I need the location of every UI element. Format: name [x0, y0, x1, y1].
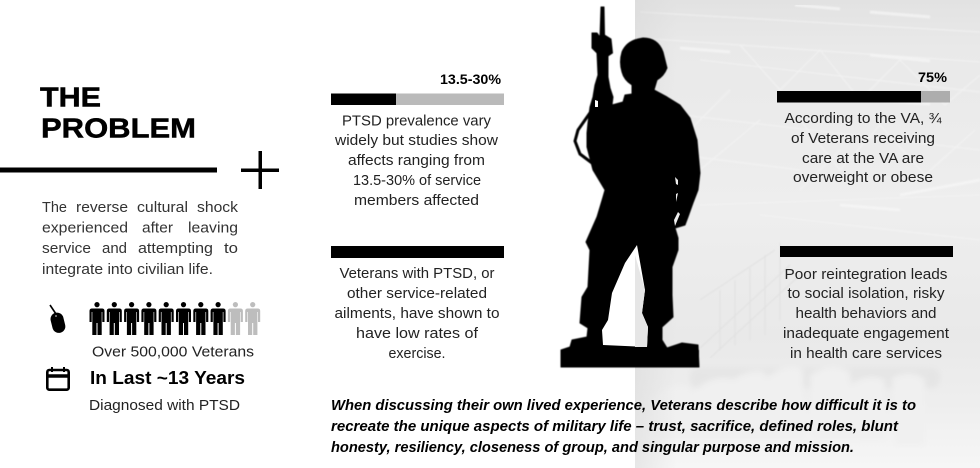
intro text: [42, 200, 239, 278]
stat panel: PTSD prevalence: 13.5-30% of service: [353, 173, 481, 189]
stat panel: reintegration: to social isolation, risky: [788, 286, 945, 302]
stat panel: exercise: [331, 246, 504, 362]
stat panel: PTSD prevalence: 13.5-30%: [440, 72, 501, 87]
stat panel: reintegration: Poor reintegration leads: [784, 267, 948, 283]
stat panel: reintegration: health behaviors and: [796, 306, 936, 322]
intro text: experienced: [42, 221, 128, 237]
stat panel: reintegration: [780, 246, 953, 362]
title: [40, 82, 196, 144]
stat panel: overweight: According to the VA, ¾: [784, 111, 942, 127]
intro text: leaving: [188, 221, 238, 237]
intro text: The: [42, 200, 67, 216]
title: THE: [40, 82, 101, 112]
veterans count label: Over 500,000 Veterans: [92, 345, 254, 361]
stat panel: exercise: have low rates of: [356, 326, 479, 342]
soldier silhouette: [561, 7, 700, 367]
stat panel: exercise: exercise.: [388, 346, 446, 362]
title: PROBLEM: [41, 112, 196, 144]
intro text: attempting: [138, 241, 213, 257]
divider line with plus sign: [0, 151, 279, 189]
icon: calendar: [47, 367, 69, 390]
intro text: reverse: [76, 200, 128, 216]
stat panel: exercise: Veterans with PTSD, or: [340, 266, 495, 282]
time period heading: In Last ~13 Years: [90, 368, 245, 388]
stat panel: PTSD prevalence: widely but studies show: [334, 133, 499, 149]
intro text: and: [102, 241, 127, 257]
stat panel: overweight: [777, 70, 950, 186]
intro text: to: [224, 241, 238, 257]
icon: mouse tag: [49, 305, 67, 334]
diagnosis label: Diagnosed with PTSD: [89, 398, 240, 414]
intro text: integrate into civilian life.: [42, 262, 213, 278]
intro text: shock: [197, 200, 239, 216]
closing statement: honesty, resiliency, closeness of group, and singular purpose and mission.: [331, 440, 854, 456]
icon: people pictogram: [90, 302, 260, 335]
stat panel: overweight: overweight or obese: [793, 170, 933, 186]
closing statement: recreate the unique aspects of military life – trust, sacrifice, defined roles, blunt: [331, 419, 899, 435]
stat panel: reintegration: inadequate engagement: [783, 326, 949, 342]
stat panel: overweight: care at the VA are: [802, 151, 924, 167]
intro text: after: [142, 221, 173, 237]
stat panel: overweight: of Veterans receiving: [791, 131, 935, 147]
closing statement: [331, 398, 916, 456]
intro text: service: [42, 241, 91, 257]
intro text: cultural: [137, 200, 188, 216]
stat panel: PTSD prevalence: affects ranging from: [348, 153, 485, 169]
stat panel: reintegration: in health care services: [790, 346, 942, 362]
stat panel: PTSD prevalence: members affected: [354, 193, 479, 209]
background photo panel: [635, 0, 980, 468]
stat panel: PTSD prevalence: [331, 72, 504, 209]
stat panel: PTSD prevalence: PTSD prevalence vary: [342, 114, 492, 130]
closing statement: When discussing their own lived experience, Veterans describe how difficult it is to: [331, 398, 916, 414]
stat panel: exercise: ailments, have shown to: [334, 306, 500, 322]
stat panel: exercise: other service-related: [347, 286, 487, 302]
stat panel: overweight: 75%: [918, 70, 947, 85]
